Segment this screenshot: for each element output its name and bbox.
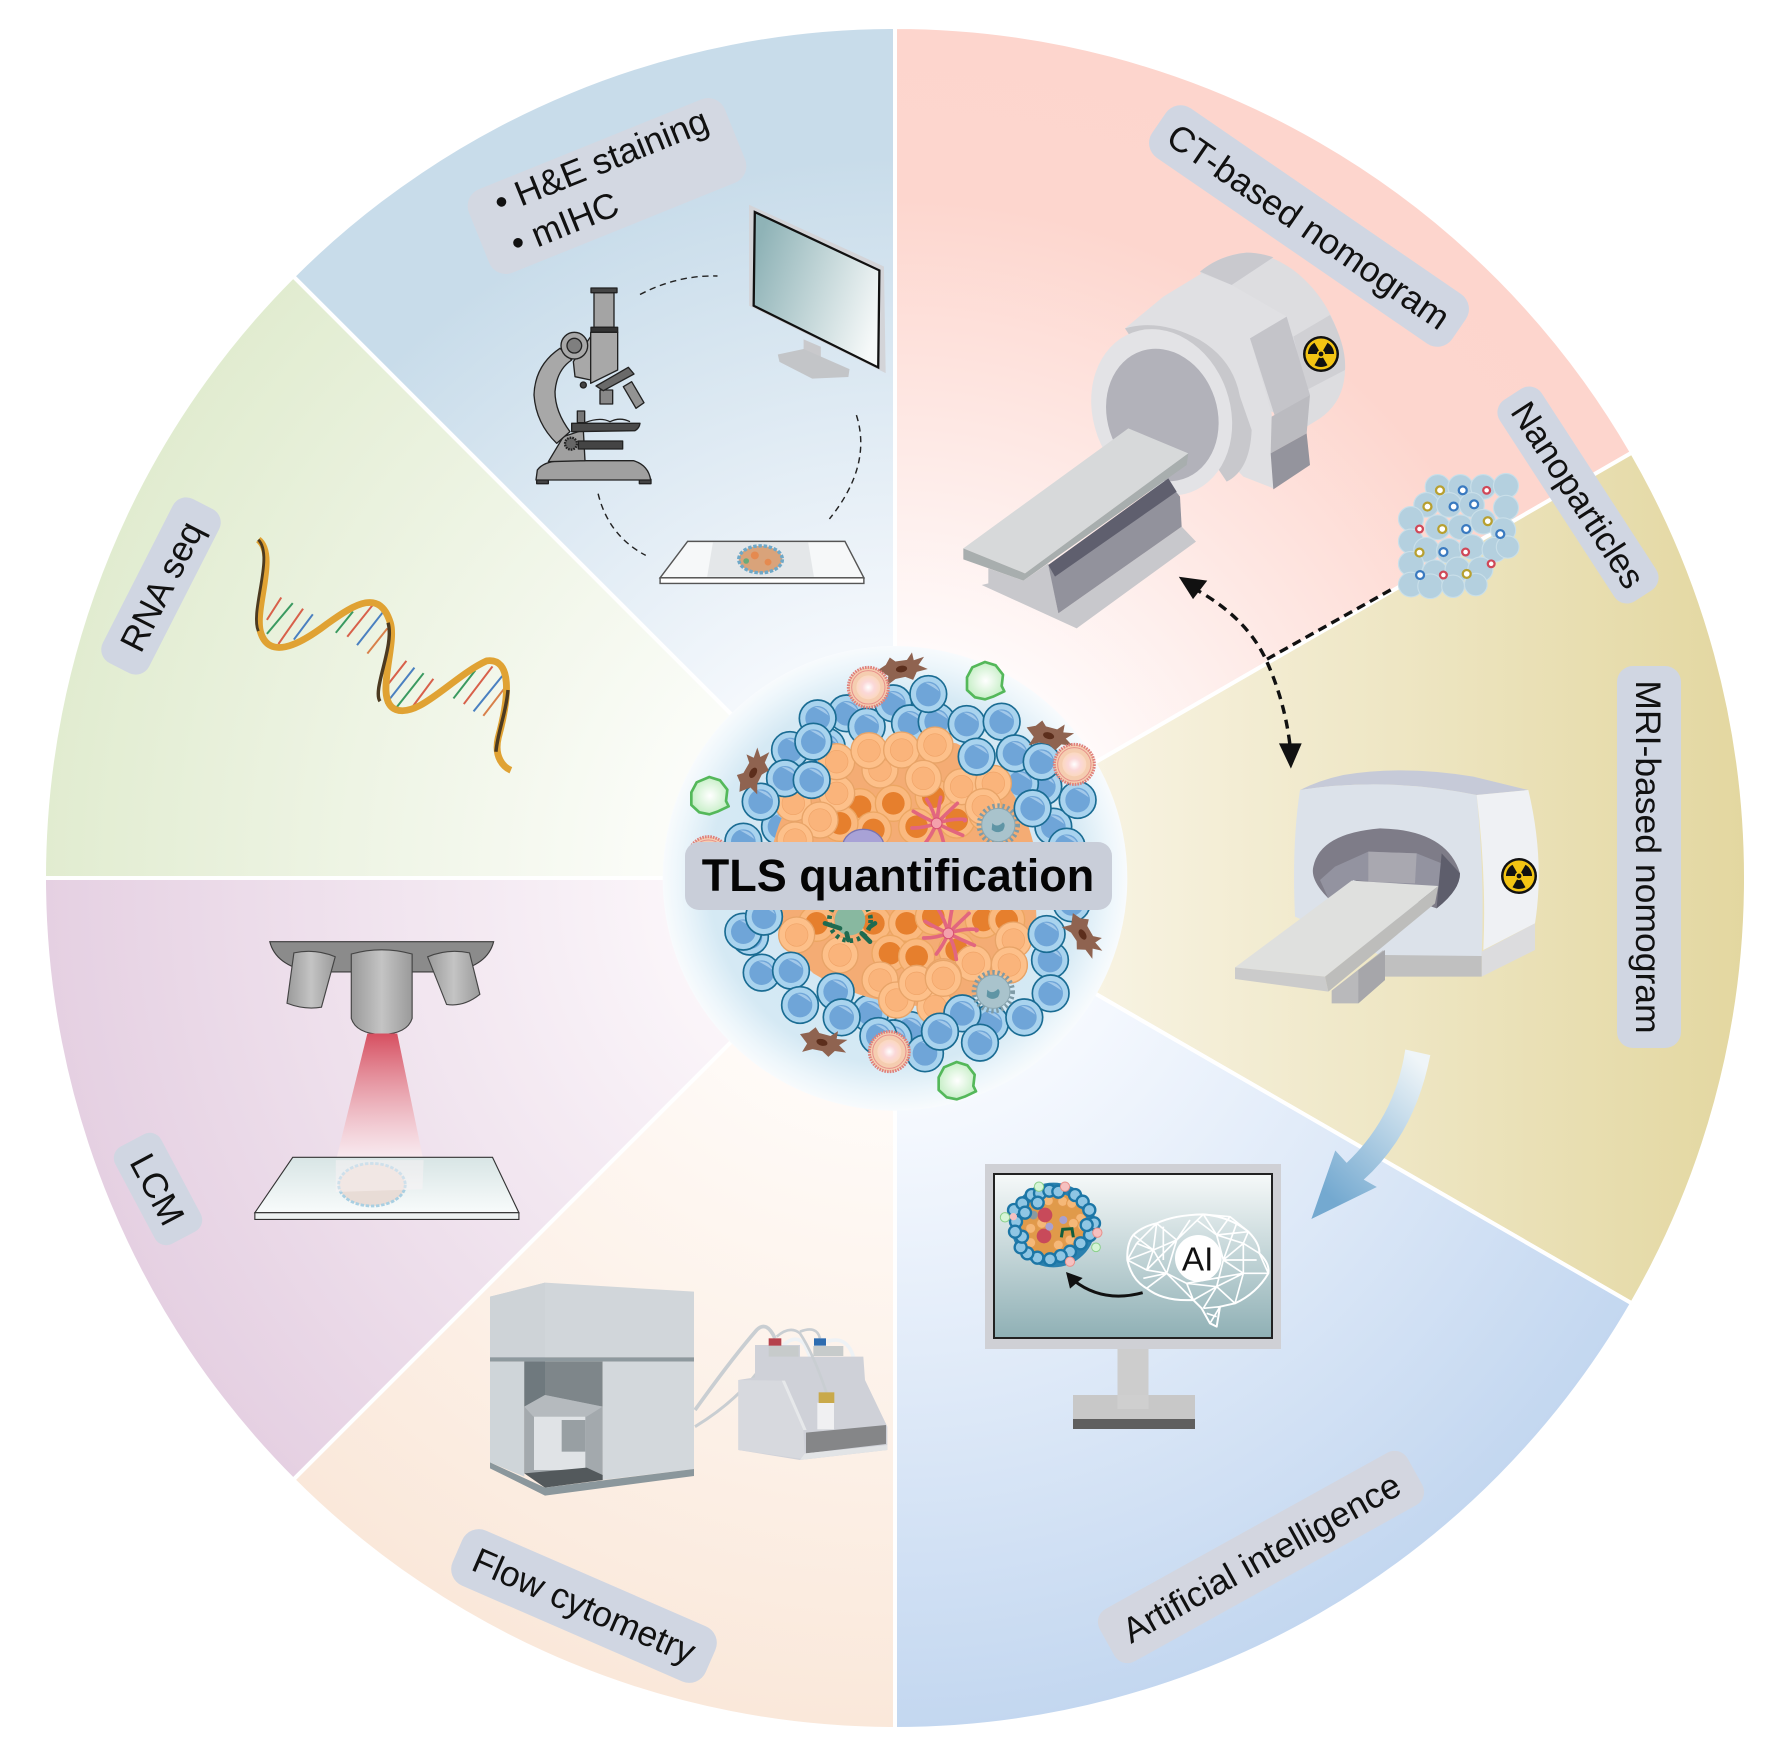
- label: H&E staining and mIHC: • H&E staining: [488, 100, 714, 223]
- label: H&E staining and mIHC: • mIHC: [505, 184, 624, 263]
- sector: CT-based nomogram: [895, 27, 1632, 878]
- dashed cycle arrows: [598, 276, 861, 555]
- label: Flow cytometry: Flow cytometry: [467, 1540, 702, 1672]
- curved black arrow: [1066, 1272, 1143, 1296]
- mini tumor cluster: [1000, 1182, 1102, 1266]
- panel: central tumor with TLS cells: [663, 646, 1127, 1111]
- label: H&E staining and mIHC: [462, 93, 752, 279]
- dark orange cells: [799, 779, 1025, 975]
- reagent unit: [738, 1329, 887, 1460]
- label: Nanoparticles: Nanoparticles: [1503, 395, 1652, 596]
- icon: tissue slide: [660, 541, 864, 583]
- icon: MRI radiation symbol: [1501, 858, 1537, 894]
- glow disc: [663, 646, 1127, 1111]
- title: TLS quantification: [685, 842, 1112, 910]
- sector: H&E staining and mIHC: [293, 27, 895, 878]
- icon: computer monitor: [749, 205, 886, 379]
- icon: flow cytometer: [490, 1283, 887, 1496]
- pink star cell top: [912, 797, 966, 849]
- icon: DNA helix: [256, 540, 511, 770]
- front blue cells: [725, 676, 1096, 1072]
- label: RNA seq: [96, 492, 226, 680]
- orange cells: [775, 727, 1031, 1025]
- purple cell: [843, 829, 884, 864]
- label: Flow cytometry: [445, 1523, 723, 1689]
- icon: AI monitor: [985, 1164, 1281, 1429]
- label: LCM: LCM: [122, 1147, 192, 1232]
- label: Artificial intelligence: Artificial intelligence: [1115, 1465, 1408, 1651]
- sector: RNA seq: [44, 276, 895, 878]
- screen content: [1000, 1182, 1269, 1327]
- label: CT-based nomogram: CT-based nomogram: [1160, 116, 1457, 338]
- sector: MRI-based nomogram: [895, 452, 1746, 1304]
- icon: MRI scanner: [1235, 770, 1539, 1003]
- sector: flow cytometry: [293, 878, 895, 1729]
- icon: laser capture microscope objective: [255, 942, 519, 1219]
- tumor core blob: [772, 739, 1037, 1007]
- label: RNA seq: RNA seq: [112, 515, 212, 658]
- icon: CT scanner: [963, 253, 1345, 628]
- icon: CT radiation symbol: [1303, 336, 1339, 372]
- title: TLS quantification: TLS quantification: [702, 850, 1094, 901]
- teal spiky cell top: [979, 806, 1018, 844]
- teal spiky cell bottom: [974, 972, 1013, 1011]
- sector: artificial intelligence: [895, 878, 1632, 1729]
- back blue cells: [725, 685, 1085, 1057]
- tubing: [695, 1326, 853, 1427]
- main cytometer box: [490, 1283, 694, 1496]
- icon: nanoparticle cluster: [1398, 473, 1519, 599]
- pink star cell bottom: [924, 907, 977, 959]
- label: MRI-based nomogram: [1617, 666, 1681, 1048]
- fibroblasts: [728, 651, 1109, 1063]
- sector: LCM: [44, 878, 895, 1480]
- orange cells overlapping blue: [925, 947, 1027, 996]
- pink ring cells: [688, 667, 1094, 1072]
- arrow: curved blue arrow from MRI to AI: [1311, 1050, 1430, 1219]
- icon: microscope: [534, 288, 651, 484]
- label: MRI-based nomogram: MRI-based nomogram: [1628, 680, 1668, 1034]
- label: LCM: [109, 1128, 207, 1250]
- arrow: dashed link from nanoparticles to CT and MRI: [1179, 577, 1392, 769]
- green spiky cell: [825, 899, 875, 942]
- green hexagon cells: [691, 662, 1004, 1099]
- AI text: AI: [1182, 1241, 1213, 1278]
- AI brain mesh: [1127, 1214, 1269, 1327]
